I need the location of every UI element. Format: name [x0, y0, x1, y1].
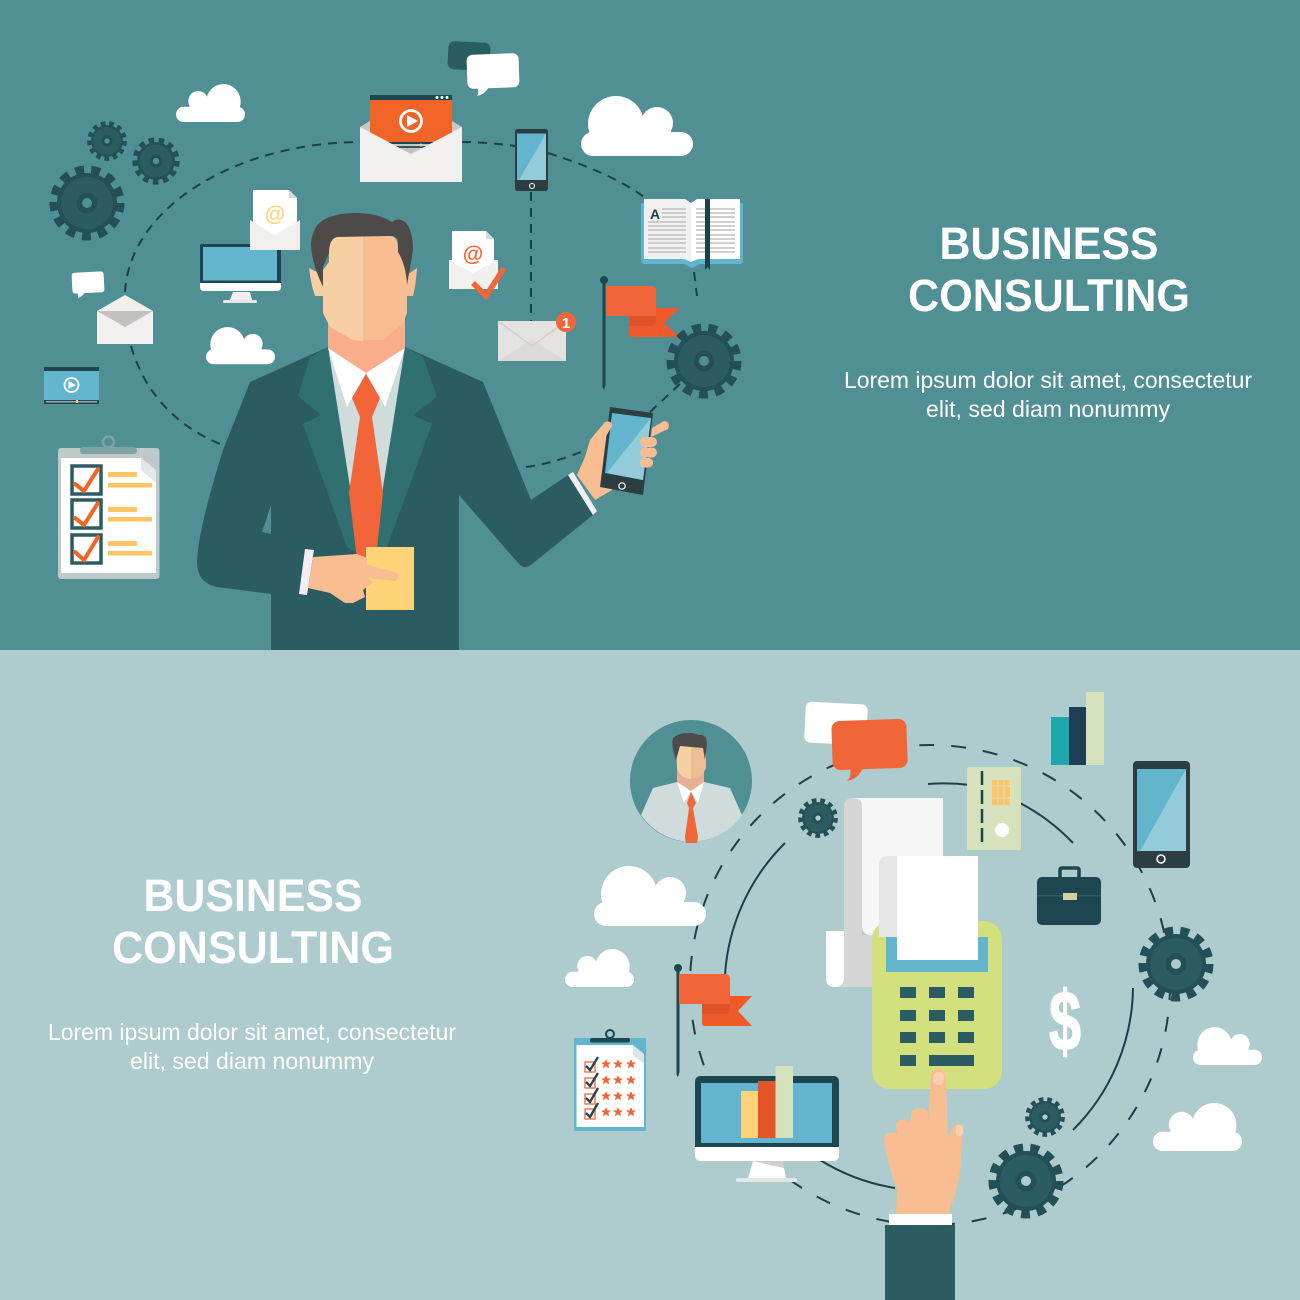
icon: open book: A [650, 206, 660, 222]
avatar: consultant portrait [630, 720, 752, 843]
icon: phone bottom right [1133, 761, 1190, 868]
heading: top title: CONSULTING [908, 270, 1190, 321]
left cuff [299, 549, 314, 595]
icon: email with yellow at sign [253, 190, 297, 240]
tie [349, 374, 383, 567]
icon: dollar sign: $ [1049, 974, 1081, 1068]
right cuff [568, 472, 597, 515]
icon: open book [641, 199, 743, 270]
neck [328, 318, 405, 374]
icon: rating checklist [574, 1030, 646, 1131]
text block: bottom description: Lorem ipsum dolor sit amet, consectetur [48, 1019, 456, 1045]
icon: open envelope left [97, 295, 153, 344]
icon: credit card [967, 767, 1021, 850]
left lapel [298, 347, 357, 553]
heading: bottom title: CONSULTING [112, 922, 394, 973]
businessman figure [197, 213, 669, 650]
collar [328, 348, 405, 407]
face [323, 236, 363, 341]
hair [311, 213, 413, 287]
ears [309, 268, 417, 296]
holding hand [577, 422, 612, 500]
icon: video envelope [360, 95, 462, 182]
solid inner arcs: bottom [725, 783, 1133, 1188]
icon: gear right of man [672, 329, 736, 393]
icon: cloud top left [176, 84, 245, 122]
payment terminal [872, 856, 1002, 1089]
right lapel [377, 347, 437, 547]
dashed network lines: top [125, 142, 697, 467]
text block: bottom description [48, 1019, 456, 1074]
panel: bottom background [0, 650, 1300, 1300]
yellow card [366, 547, 414, 610]
icon: email with orange at sign and check: @ [463, 243, 483, 266]
icon: closed envelope with badge [498, 312, 576, 361]
pointing hand and sleeve [884, 1069, 963, 1300]
icon: closed envelope with badge: 1 [562, 315, 570, 332]
heading: bottom title [112, 870, 394, 973]
icon: email with yellow at sign: @ [265, 203, 285, 226]
icon: small speech bubble left [71, 271, 105, 298]
icon: cloud beside monitor [206, 327, 275, 364]
icon: flag top [600, 276, 680, 390]
icon: cloud top large [581, 96, 693, 156]
icon: email with orange at sign and check [449, 231, 504, 296]
heading: bottom title: BUSINESS [144, 870, 362, 921]
panel: top background [0, 0, 1300, 650]
text block: top description: elit, sed diam nonummy [926, 396, 1170, 422]
held phone [600, 407, 653, 495]
icon: phone top [515, 129, 548, 191]
dashed outer circle: bottom [690, 745, 1170, 1225]
icon: desktop monitor [200, 244, 281, 303]
arm gap [262, 505, 271, 534]
icon: clouds bottom [565, 866, 1262, 1151]
icon: envelope front for yellow email [250, 220, 300, 250]
icon: gears bottom [801, 801, 1208, 1213]
icon: monitor with bar chart [695, 1066, 839, 1182]
heading: top title [908, 218, 1190, 321]
icon: clipboard checklist [58, 436, 160, 579]
icon: video player left [44, 367, 99, 404]
icon: flag bottom [674, 964, 752, 1077]
heading: top title: BUSINESS [940, 218, 1158, 269]
receipt paper roll [826, 798, 943, 987]
icon: briefcase [1037, 868, 1101, 925]
icon: speech bubbles bottom [804, 701, 908, 781]
shirt [328, 347, 405, 495]
icon: bar chart top right [1051, 692, 1104, 765]
text block: top description: Lorem ipsum dolor sit amet, consectetur [844, 367, 1252, 393]
icon: gears top left [55, 124, 176, 235]
text block: bottom description: elit, sed diam nonummy [130, 1048, 374, 1074]
thumb and fingers [596, 421, 669, 468]
text block: top description [844, 367, 1252, 422]
jacket [197, 347, 593, 650]
icon: speech bubbles top [447, 41, 520, 96]
pointing hand [308, 554, 398, 603]
